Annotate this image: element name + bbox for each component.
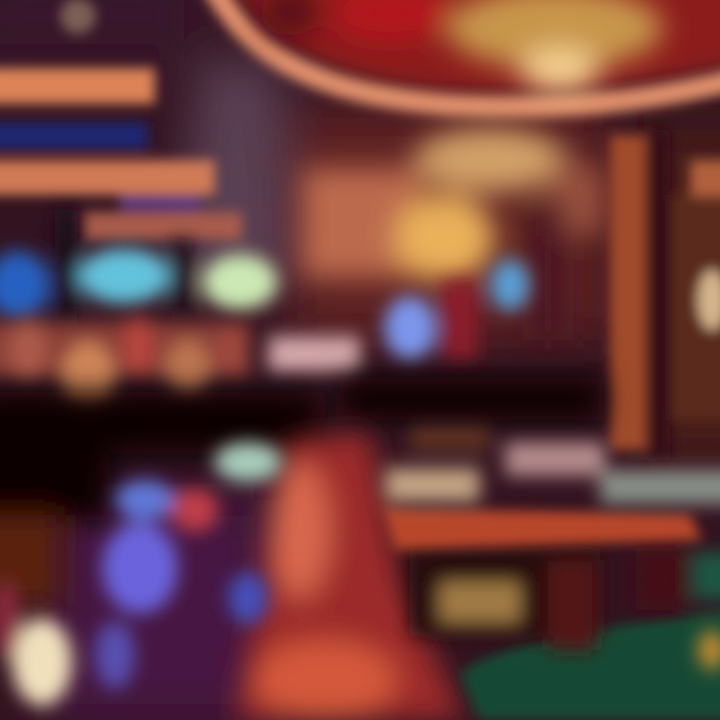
- table shadow and legs: [410, 548, 720, 670]
- ceiling peach rim: [210, 0, 720, 107]
- dark floor band: [0, 378, 602, 605]
- ceiling ring: [210, 0, 720, 107]
- carpet blue lights: [0, 442, 282, 706]
- ceiling gold chandelier: [260, 0, 663, 92]
- slot machine screens: [0, 210, 278, 330]
- table top: [382, 508, 702, 550]
- slot machine row: [0, 315, 250, 414]
- gaming table: [382, 428, 720, 670]
- carpet lights: [235, 432, 465, 720]
- wooden pillar and right panels: [610, 130, 720, 460]
- table items: [385, 428, 720, 504]
- centre screens: [268, 259, 530, 372]
- upper left light bars: [0, 0, 242, 240]
- green felt: [460, 606, 720, 720]
- central chandelier and drapes: [302, 128, 605, 340]
- ceiling interior red: [225, 0, 720, 92]
